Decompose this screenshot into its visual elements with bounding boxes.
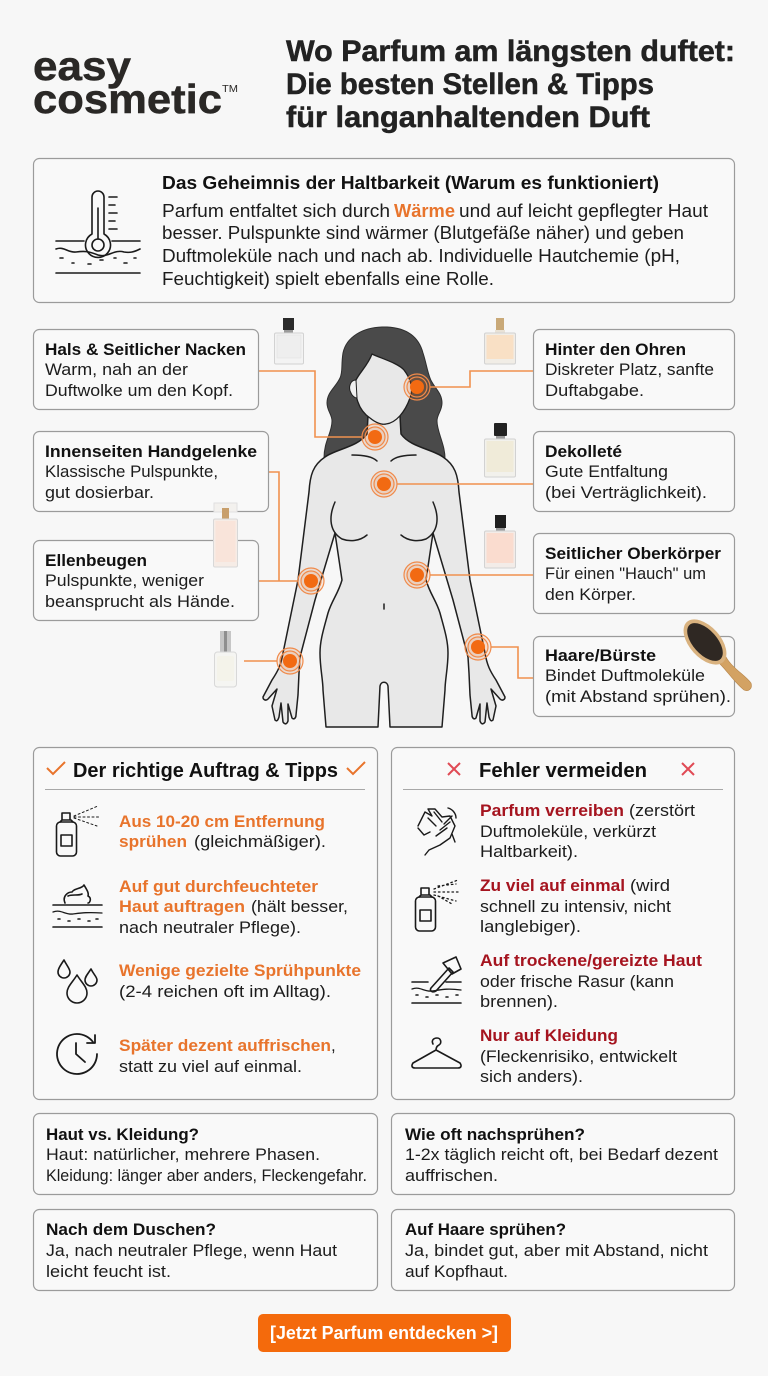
card: neck: Duftwolke um den Kopf. (45, 381, 233, 400)
mistake: clothing only: Nur auf Kleidung (480, 1026, 618, 1045)
brush (675, 612, 751, 691)
call to action button: [Jetzt Parfum entdecken >] (270, 1323, 498, 1343)
card: upper body side: Für einen "Hauch" um (545, 564, 706, 583)
icon: hanger (412, 1038, 461, 1068)
mistake: dry skin: brennen). (480, 992, 558, 1011)
icon: razor on skin (412, 957, 461, 1003)
card: elbows: beansprucht als Hände. (45, 592, 235, 611)
mistake: rubbing: Haltbarkeit). (480, 842, 578, 861)
mistake: too much (480, 876, 671, 936)
icon: spray distance (56, 806, 99, 856)
card: hair and brush (534, 636, 734, 716)
head (356, 354, 412, 424)
tip: refresh: , (331, 1036, 336, 1055)
panel: secret of longevity: Feuchtigkeit) spielt ebenfalls eine Rolle. (162, 269, 494, 289)
panel: secret of longevity: besser. Pulspunkte sind wärmer (Blutgefäße näher) und geben (162, 223, 684, 243)
faq: skin vs clothing: Haut: natürlicher, mehrere Phasen. (46, 1145, 320, 1164)
panel: secret of longevity: Wärme (394, 201, 455, 221)
icon: drops (58, 960, 97, 1003)
tip: spray points: Wenige gezielte Sprühpunkte (119, 961, 361, 980)
card: decollete: (bei Verträglichkeit). (545, 483, 707, 502)
tip: moisturised skin: (hält besser, (251, 897, 348, 916)
collarbones and details (331, 455, 437, 609)
card: behind the ears (534, 330, 734, 410)
mistake: too much: Zu viel auf einmal (480, 876, 625, 895)
bottle: peach (484, 318, 516, 364)
mistake: rubbing: Duftmoleküle, verkürzt (480, 822, 656, 841)
ear (350, 380, 357, 398)
card: neck: Warm, nah an der (45, 360, 188, 379)
mistake: clothing only (480, 1026, 677, 1086)
faq: skin vs clothing: Haut vs. Kleidung? (46, 1125, 199, 1144)
icon: rubbing hands (418, 808, 456, 855)
pulse point: right wrist (465, 634, 491, 660)
bottle: tall rose (214, 503, 238, 567)
heading with crosses (403, 760, 723, 790)
mistake: too much: (wird (630, 876, 670, 895)
faq: skin vs clothing: Kleidung: länger aber anders, Fleckengefahr. (46, 1166, 367, 1185)
icon: clock (57, 1034, 97, 1074)
card: hair and brush: (mit Abstand sprühen). (545, 687, 731, 706)
tip: distance (119, 812, 326, 851)
bottle: cream (484, 423, 516, 477)
faq: how often: Wie oft nachsprühen? (405, 1125, 585, 1144)
faq: on hair (392, 1210, 734, 1290)
pulse point: elbow (298, 568, 324, 594)
mistake: dry skin: oder frische Rasur (kann (480, 972, 674, 991)
tip: distance: (gleichmäßiger). (194, 832, 326, 851)
faq: on hair: Ja, bindet gut, aber mit Abstand, nicht (405, 1241, 708, 1260)
title: Die besten Stellen & Tipps (286, 68, 654, 101)
mistake: rubbing (480, 801, 695, 861)
icon: too much spray (416, 880, 458, 931)
card: wrists: Klassische Pulspunkte, (45, 462, 218, 481)
logo: TM (222, 84, 238, 95)
title (286, 35, 735, 134)
tip: moisturised skin: Auf gut durchfeuchteter (119, 877, 318, 896)
card: wrists: Innenseiten Handgelenke (45, 442, 257, 461)
card: elbows: Ellenbeugen (45, 551, 147, 570)
hair (324, 327, 445, 462)
mistake: dry skin: Auf trockene/gereizte Haut (480, 951, 702, 970)
heading with checks: Der richtige Auftrag & Tipps (73, 760, 338, 782)
panel: secret of longevity: Das Geheimnis der Haltbarkeit (Warum es funktioniert) (162, 173, 659, 193)
pulse point: ear (404, 374, 430, 400)
tip: distance: sprühen (119, 832, 187, 851)
faq: skin vs clothing (34, 1114, 378, 1194)
torso and arms (263, 416, 505, 727)
pulse point: neck (362, 424, 388, 450)
connector lines (244, 371, 533, 678)
pulse point: chest (371, 471, 397, 497)
faq: after shower: Nach dem Duschen? (46, 1220, 216, 1239)
heading with checks (45, 760, 365, 790)
card: wrists: gut dosierbar. (45, 483, 154, 502)
bottle: pink (484, 515, 516, 568)
faq: after shower (34, 1210, 378, 1290)
card: decollete: Gute Entfaltung (545, 462, 668, 481)
mistake: too much: schnell zu intensiv, nicht (480, 897, 671, 916)
mistake: rubbing: Parfum verreiben (480, 801, 624, 820)
faq: on hair: auf Kopfhaut. (405, 1262, 508, 1281)
logo (33, 43, 238, 122)
icon: thermometer on skin (56, 191, 140, 273)
panel: mistakes (392, 748, 734, 1100)
tip: spray points (119, 961, 361, 1001)
title: Wo Parfum am längsten duftet: (286, 35, 735, 68)
bottle: clear (274, 318, 304, 364)
bottle: white (214, 631, 236, 687)
faq: on hair: Auf Haare sprühen? (405, 1220, 566, 1239)
mistake: too much: langlebiger). (480, 917, 581, 936)
tip: moisturised skin: Haut auftragen (119, 897, 245, 916)
tip: refresh (119, 1036, 336, 1076)
card: neck: Hals & Seitlicher Nacken (45, 340, 246, 359)
panel: correct application (34, 748, 378, 1100)
tip: spray points: (2-4 reichen oft im Alltag). (119, 982, 331, 1001)
card: decollete (534, 432, 734, 512)
faq: how often (392, 1114, 734, 1194)
body illustration (263, 327, 505, 727)
card: decollete: Dekolleté (545, 442, 622, 461)
faq: how often: 1-2x täglich reicht oft, bei Bedarf dezent (405, 1145, 718, 1164)
card: upper body side: Seitlicher Oberkörper (545, 544, 721, 563)
heading with crosses: Fehler vermeiden (479, 760, 647, 782)
card: hair and brush: Bindet Duftmoleküle (545, 666, 705, 685)
logo: easy (33, 43, 131, 89)
card: upper body side: den Körper. (545, 585, 636, 604)
title: für langanhaltenden Duft (286, 101, 650, 134)
panel: secret of longevity: Duftmoleküle nach und nach ab. Individuelle Hautchemie (pH, (162, 246, 680, 266)
faq: how often: auffrischen. (405, 1166, 498, 1185)
tip: refresh: statt zu viel auf einmal. (119, 1057, 302, 1076)
panel: secret of longevity: und auf leicht gepflegter Haut (459, 201, 708, 221)
icon: moisturised skin (53, 885, 102, 927)
card: behind the ears: Hinter den Ohren (545, 340, 686, 359)
call to action button (258, 1314, 511, 1352)
pulse point: left wrist (277, 648, 303, 674)
tip: distance: Aus 10-20 cm Entfernung (119, 812, 325, 831)
mistake: clothing only: (Fleckenrisiko, entwickelt (480, 1047, 677, 1066)
card: elbows: Pulspunkte, weniger (45, 571, 204, 590)
tip: refresh: Später dezent auffrischen (119, 1036, 331, 1055)
card: hair and brush: Haare/Bürste (545, 646, 656, 665)
card: upper body side (534, 534, 734, 614)
tip: moisturised skin (119, 877, 348, 937)
faq: after shower: leicht feucht ist. (46, 1262, 171, 1281)
mistake: rubbing: (zerstört (629, 801, 695, 820)
card: neck (34, 330, 258, 410)
mistake: dry skin (480, 951, 702, 1011)
card: elbows (34, 540, 258, 620)
panel: secret of longevity (34, 158, 734, 302)
tip: moisturised skin: nach neutraler Pflege). (119, 918, 301, 937)
card: behind the ears: Duftabgabe. (545, 381, 644, 400)
pulse point: side (404, 562, 430, 588)
logo: cosmetic (33, 76, 222, 122)
faq: after shower: Ja, nach neutraler Pflege, wenn Haut (46, 1241, 337, 1260)
card: behind the ears: Diskreter Platz, sanfte (545, 360, 714, 379)
panel: secret of longevity: Parfum entfaltet sich durch (162, 201, 390, 221)
card: wrists (34, 432, 268, 512)
mistake: clothing only: sich anders). (480, 1067, 583, 1086)
